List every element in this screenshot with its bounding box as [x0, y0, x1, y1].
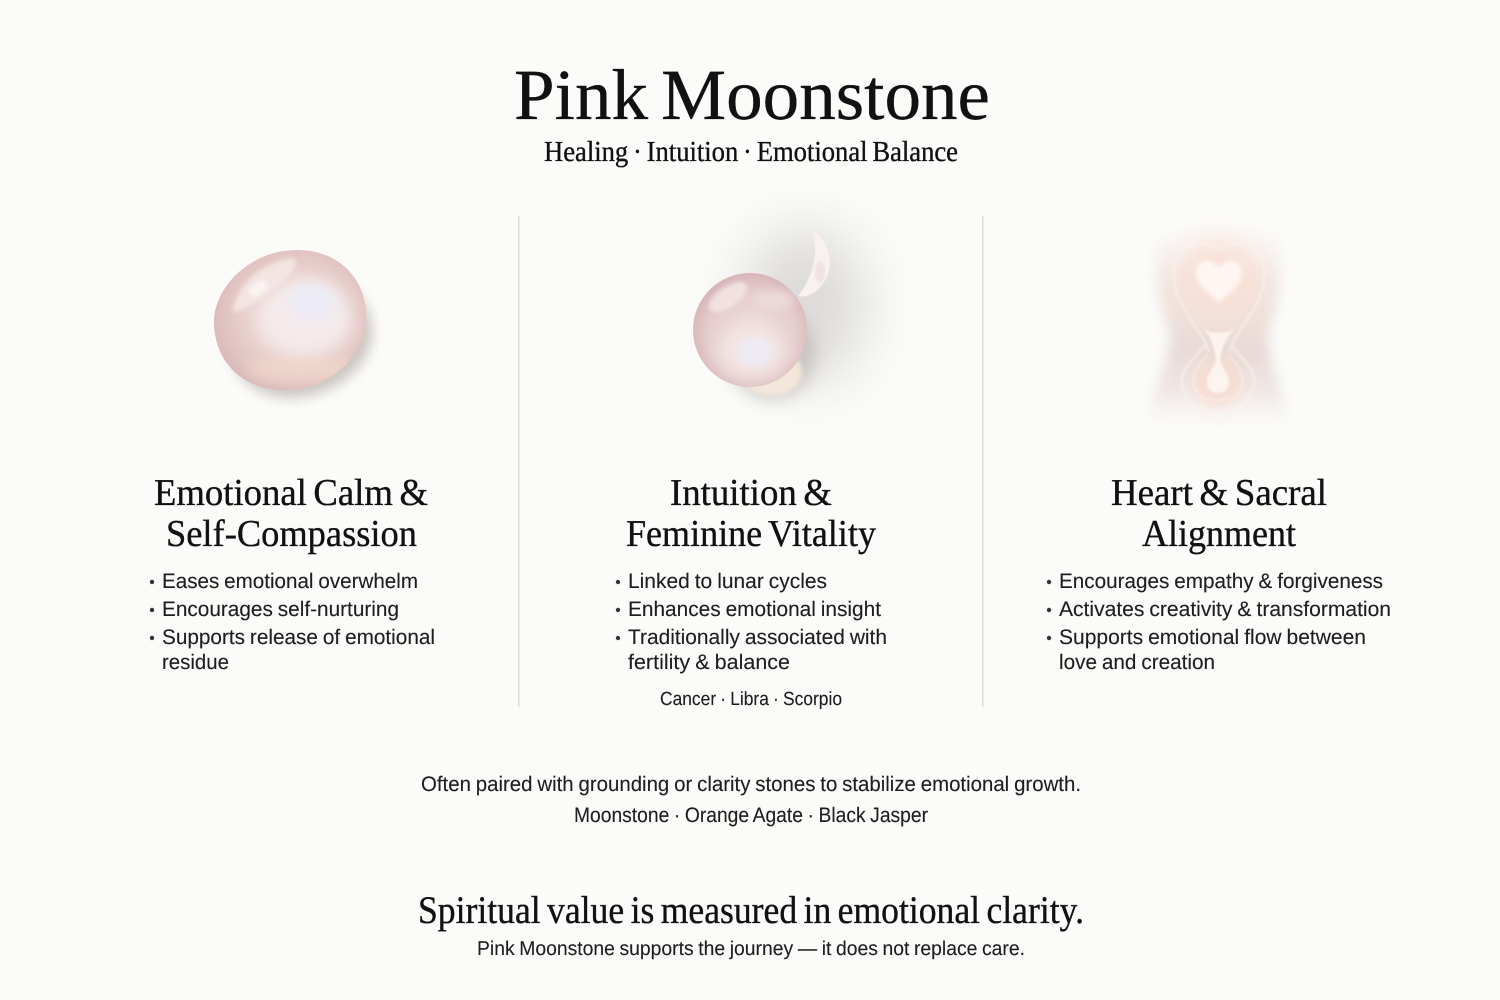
- pairing note: Often paired with grounding or clarity stones to stabilize emotional growth.: [421, 773, 1081, 796]
- zodiac signs: Cancer · Libra · Scorpio: [660, 689, 842, 710]
- bullet list: emotional calm: Eases emotional overwhelm: [162, 570, 418, 593]
- bullet list: intuition: Enhances emotional insight: [628, 598, 881, 621]
- heading: intuition: [626, 472, 876, 555]
- pairing note: Moonstone · Orange Agate · Black Jasper: [574, 804, 928, 827]
- heading: heart and sacral: [1111, 472, 1327, 555]
- heading: emotional calm: Emotional Calm &: [154, 472, 428, 514]
- bullet list: intuition: fertility & balance: [628, 651, 790, 674]
- panel: heart and sacral: [1047, 228, 1391, 674]
- heading: emotional calm: [154, 472, 428, 555]
- pairing note: [421, 773, 1081, 827]
- bullet list: heart and sacral: Encourages empathy & forgiveness: [1059, 570, 1383, 593]
- icon: oval pink moonstone: [214, 250, 372, 398]
- title: Pink Moonstone: [514, 55, 990, 135]
- heading: emotional calm: Self-Compassion: [166, 513, 417, 555]
- bullet list: emotional calm: Supports release of emotional: [162, 626, 435, 649]
- bullet list: emotional calm: [150, 570, 435, 674]
- crescent moon: [798, 231, 830, 297]
- bullet list: intuition: Traditionally associated with: [628, 626, 887, 649]
- bullet list: heart and sacral: [1047, 570, 1391, 674]
- bullet list: emotional calm: Encourages self-nurturing: [162, 598, 399, 621]
- divider right: [982, 216, 984, 707]
- disclaimer: Pink Moonstone supports the journey — it does not replace care.: [477, 938, 1025, 960]
- bullet list: intuition: Linked to lunar cycles: [628, 570, 827, 593]
- bullet list: heart and sacral: love and creation: [1059, 651, 1215, 674]
- bullet list: heart and sacral: Activates creativity & transformation: [1059, 598, 1391, 621]
- icon: round moonstone and crescent moon: [693, 227, 867, 400]
- subtitle: Healing · Intuition · Emotional Balance: [544, 136, 958, 168]
- bullet list: intuition: [616, 570, 887, 674]
- heading: intuition: Feminine Vitality: [626, 513, 876, 555]
- bullet list: emotional calm: residue: [162, 651, 229, 674]
- heart: [1196, 261, 1242, 303]
- divider left: [518, 216, 520, 707]
- energy lines: [1174, 243, 1264, 424]
- sacral stream and drop: [1196, 322, 1242, 393]
- heading: intuition: Intuition &: [670, 472, 832, 514]
- panel: intuition: [616, 227, 887, 710]
- heading: heart and sacral: Alignment: [1142, 513, 1296, 555]
- closing statement: Spiritual value is measured in emotional clarity.: [418, 889, 1084, 932]
- heading: heart and sacral: Heart & Sacral: [1111, 472, 1327, 514]
- bullet list: heart and sacral: Supports emotional flow between: [1059, 626, 1366, 649]
- icon: glowing torso with heart and sacral drop: [1146, 228, 1292, 436]
- panel: emotional calm: [150, 250, 435, 674]
